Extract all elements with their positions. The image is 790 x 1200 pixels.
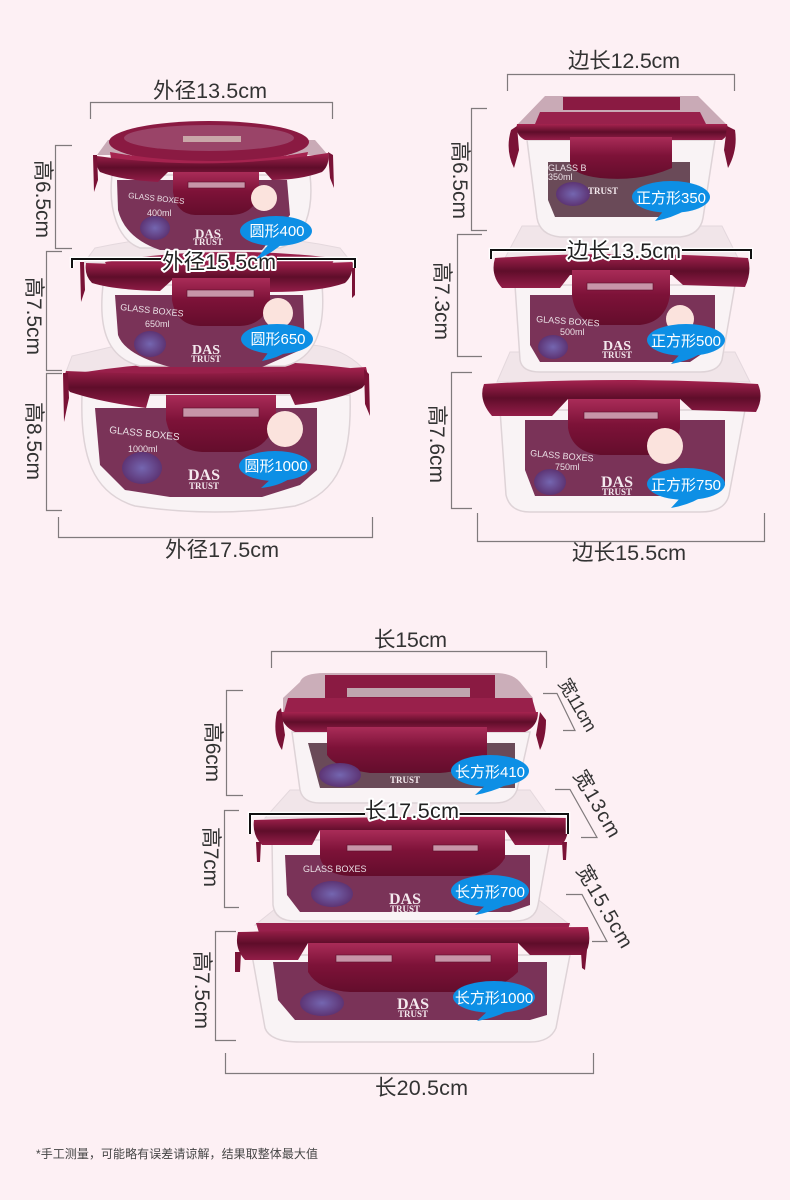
dimension: round height 8.5 bbox=[22, 374, 62, 510]
label bubble: 圆形650 bbox=[241, 324, 313, 361]
dimension: square height 7.6: 高7.6cm bbox=[425, 405, 448, 483]
container: round 1000: GLASS BOXES bbox=[109, 425, 180, 443]
dimension: rectangle height 7.5 bbox=[190, 932, 236, 1040]
dimension: round 15.5: 外径15.5cm bbox=[162, 250, 276, 274]
container: round 400: 400ml bbox=[147, 208, 172, 218]
dimension: rectangle 20.5: 长20.5cm bbox=[375, 1076, 468, 1100]
dimension: square 15.5 bbox=[478, 513, 764, 565]
dimension: rectangle 20.5 bbox=[226, 1053, 594, 1100]
container: round 650 bbox=[80, 235, 355, 367]
label bubble: 圆形1000: 圆形1000 bbox=[244, 458, 308, 475]
dimension: round 13.5 bbox=[90, 79, 332, 119]
dimension: rectangle height 6 bbox=[201, 690, 243, 796]
container: round 1000: TRUST bbox=[189, 481, 219, 491]
container: square 500: DAS bbox=[603, 339, 631, 354]
container: round 650: GLASS BOXES bbox=[120, 302, 184, 319]
dimension: round height 6.5: 高6.5cm bbox=[31, 160, 54, 238]
container: square 500: GLASS BOXES bbox=[536, 314, 600, 328]
label bubble: 正方形350 bbox=[632, 181, 710, 221]
container: round 400 bbox=[93, 121, 334, 250]
dimension: square height 6.5: 高6.5cm bbox=[448, 141, 471, 219]
container: square 350 bbox=[509, 96, 736, 237]
container: square 750: DAS bbox=[601, 474, 633, 491]
container: square 500: TRUST bbox=[602, 350, 632, 360]
container: rectangle 410 bbox=[275, 673, 546, 803]
label bubble: 长方形700 bbox=[451, 875, 529, 915]
dimension: rectangle height 7.5: 高7.5cm bbox=[190, 951, 213, 1029]
dimension: round 17.5: 外径17.5cm bbox=[165, 538, 279, 562]
label bubble: 长方形410: 长方形410 bbox=[455, 764, 525, 781]
dimension: square 12.5 bbox=[508, 49, 734, 91]
dimension: round 17.5 bbox=[58, 517, 372, 562]
dimension: square height 7.3 bbox=[430, 234, 482, 356]
container: square 500 bbox=[494, 226, 749, 372]
dimension: rectangle 15 bbox=[272, 628, 546, 668]
container: rectangle 700: DAS bbox=[389, 891, 421, 908]
label bubble: 正方形500: 正方形500 bbox=[651, 333, 721, 350]
label bubble: 正方形500 bbox=[647, 324, 725, 364]
label bubble: 长方形700: 长方形700 bbox=[455, 884, 525, 901]
container: square 750: 750ml bbox=[555, 462, 580, 472]
dimension: width 15.5: 宽15.5cm bbox=[572, 861, 638, 952]
container: round 650: DAS bbox=[192, 343, 220, 358]
dimension: rectangle height 7: 高7cm bbox=[199, 827, 222, 887]
dimension: rectangle 15: 长15cm bbox=[374, 628, 447, 652]
dimension: round height 7.5: 高7.5cm bbox=[22, 277, 45, 355]
container: square 750 bbox=[482, 352, 761, 512]
container: round 1000: DAS bbox=[188, 467, 220, 484]
container: rectangle 700: GLASS BOXES bbox=[303, 864, 367, 874]
container: round 650: TRUST bbox=[191, 354, 221, 364]
dimension: round height 8.5: 高8.5cm bbox=[22, 402, 45, 480]
dimension: square height 6.5 bbox=[448, 108, 487, 230]
dimension: square 15.5: 边长15.5cm bbox=[572, 541, 686, 565]
container: round 400: TRUST bbox=[193, 237, 223, 247]
dimension: round height 7.5 bbox=[22, 252, 62, 370]
container: square 350: GLASS B bbox=[548, 163, 587, 173]
container: square 350: 350ml bbox=[548, 172, 573, 182]
container: round 1000: 1000ml bbox=[128, 444, 158, 454]
label bubble: 圆形1000 bbox=[239, 451, 311, 488]
dimension: square 13.5: 边长13.5cm bbox=[567, 239, 681, 263]
dimension: square 12.5: 边长12.5cm bbox=[568, 49, 680, 73]
label bubble: 圆形650: 圆形650 bbox=[250, 331, 306, 348]
dimension: width 11: 宽11cm bbox=[555, 675, 601, 735]
container: round 400: DAS bbox=[195, 226, 221, 241]
container: round 400: GLASS BOXES bbox=[128, 191, 185, 206]
dimension: square 13.5 bbox=[491, 239, 751, 263]
label bubble: 圆形400: 圆形400 bbox=[249, 223, 305, 240]
container: rectangle 700 bbox=[254, 790, 568, 921]
container: square 750: TRUST bbox=[602, 487, 632, 497]
container: rectangle 410: TRUST bbox=[390, 775, 420, 785]
label bubble: 圆形400 bbox=[240, 216, 312, 259]
dimension: round 13.5: 外径13.5cm bbox=[153, 79, 267, 103]
label bubble: 长方形410 bbox=[451, 755, 529, 795]
dimension: rectangle height 7 bbox=[199, 810, 239, 908]
dimension: square height 7.6 bbox=[425, 372, 472, 508]
dimension: round height 6.5 bbox=[31, 146, 72, 248]
container: square 500: 500ml bbox=[560, 327, 585, 337]
container: square 350: TRUST bbox=[588, 186, 618, 196]
label bubble: 正方形750 bbox=[647, 468, 725, 508]
dimension: square height 7.3: 高7.3cm bbox=[430, 262, 453, 340]
footnote: *手工测量，可能略有误差请谅解，结果取整体最大值 bbox=[36, 1146, 318, 1161]
dimension: rectangle 17.5: 长17.5cm bbox=[365, 799, 459, 823]
container: rectangle 1000: DAS bbox=[397, 996, 429, 1013]
container: rectangle 1000 bbox=[235, 897, 589, 1042]
dimension: rectangle height 6: 高6cm bbox=[201, 722, 224, 782]
label bubble: 长方形1000 bbox=[453, 981, 535, 1021]
dimension: rectangle 17.5 bbox=[250, 799, 568, 834]
label bubble: 长方形1000: 长方形1000 bbox=[455, 990, 533, 1007]
container: rectangle 700: TRUST bbox=[390, 904, 420, 914]
container: round 1000 bbox=[63, 339, 370, 512]
dimension: width 13: 宽13cm bbox=[569, 766, 626, 842]
container: square 750: GLASS BOXES bbox=[530, 448, 594, 464]
dimension: round 15.5 bbox=[72, 250, 355, 274]
container: round 650: 650ml bbox=[145, 319, 170, 329]
container: rectangle 1000: TRUST bbox=[398, 1009, 428, 1019]
label bubble: 正方形350: 正方形350 bbox=[636, 190, 706, 207]
label bubble: 正方形750: 正方形750 bbox=[651, 477, 721, 494]
